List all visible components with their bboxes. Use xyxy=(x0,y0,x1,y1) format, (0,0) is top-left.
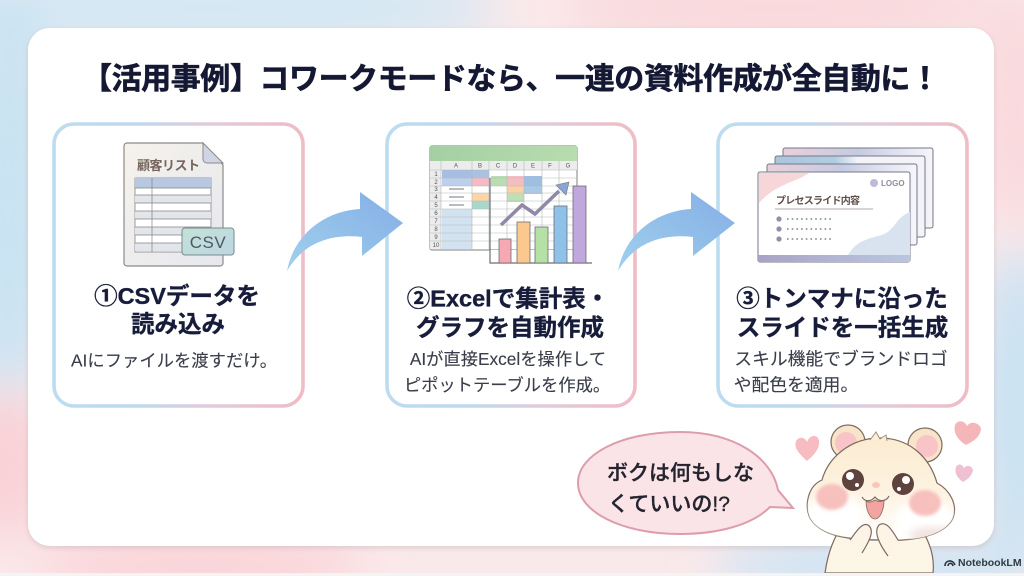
description 1: AIにファイルを渡すだけ。 xyxy=(71,350,277,370)
icon: spreadsheet with bar chart: 3 xyxy=(434,187,438,193)
arrow: step 2 to 3 xyxy=(618,192,735,271)
hamster hands xyxy=(850,524,898,556)
icon: CSV customer list document: 顧客リスト xyxy=(137,158,200,173)
bottom edge strip xyxy=(0,573,1024,576)
icon: spreadsheet with bar chart: F xyxy=(548,164,552,170)
panel: step 3 slides xyxy=(718,124,967,406)
icon: spreadsheet with bar chart xyxy=(430,146,592,263)
icon: spreadsheet with bar chart: 8 xyxy=(434,227,438,233)
icon: spreadsheet with bar chart: 4 xyxy=(434,195,438,201)
hamster mascot xyxy=(805,425,961,573)
arrow: step 1 to 2 xyxy=(287,192,403,271)
heading 1: 読み込み xyxy=(131,311,225,337)
hamster body xyxy=(825,520,933,573)
heading 3: スライドを一括生成 xyxy=(737,314,948,340)
icon: spreadsheet with bar chart: 9 xyxy=(434,235,438,241)
panel: step 1 CSV xyxy=(54,124,303,406)
speech bubble: くていいの!? xyxy=(608,493,730,516)
speech bubble xyxy=(578,432,793,534)
icon: spreadsheet with bar chart: 7 xyxy=(434,219,438,225)
panel: step 2 Excel xyxy=(387,124,635,406)
description 2: ピポットテーブルを作成。 xyxy=(404,375,610,395)
icon: stacked slide deck: LOGO xyxy=(881,179,905,188)
icon: heart top right xyxy=(955,421,981,445)
title: 【活用事例】コワークモードなら、一連の資料作成が全自動に！ xyxy=(82,62,940,96)
icon: heart small right xyxy=(955,464,973,482)
hamster nose and mouth xyxy=(862,482,889,519)
icon: spreadsheet with bar chart: 2 xyxy=(434,180,438,186)
icon: spreadsheet with bar chart: D xyxy=(513,164,518,170)
card frame 2 xyxy=(387,124,635,406)
hamster eyes xyxy=(842,469,914,495)
description 2: AIが直接Excelを操作して xyxy=(410,349,606,369)
card frame 3 xyxy=(718,124,967,406)
icon: stacked slide deck: プレセスライド内容 xyxy=(776,194,860,207)
hamster head xyxy=(807,438,955,540)
icon: spreadsheet with bar chart: 10 xyxy=(433,243,440,249)
heading 2: ②Excelで集計表・ xyxy=(407,286,609,312)
icon: heart left xyxy=(795,436,819,461)
icon: CSV customer list document: CSV xyxy=(190,233,226,252)
icon: spreadsheet with bar chart: 5 xyxy=(434,203,438,209)
icon: spreadsheet with bar chart: C xyxy=(496,164,501,170)
icon: spreadsheet with bar chart: B xyxy=(478,164,482,170)
card frame 1 xyxy=(54,124,303,406)
heading 2: グラフを自動作成 xyxy=(416,314,604,340)
heading 1: ①CSVデータを xyxy=(94,282,260,309)
description 3: スキル機能でブランドロゴ xyxy=(734,348,948,369)
icon: CSV customer list document xyxy=(124,143,234,266)
icon: spreadsheet with bar chart: 1 xyxy=(434,172,438,178)
icon: spreadsheet with bar chart: 6 xyxy=(434,211,438,217)
description 3: や配色を適用。 xyxy=(734,375,858,395)
heading 3: ③トンマナに沿った xyxy=(736,286,948,312)
speech bubble: ボクは何もしな xyxy=(607,462,754,485)
hamster ears xyxy=(831,425,942,462)
NotebookLM mark: NotebookLM xyxy=(958,557,1022,569)
hamster cheeks xyxy=(816,484,941,516)
icon: spreadsheet with bar chart: G xyxy=(566,164,571,170)
icon: spreadsheet with bar chart: A xyxy=(454,164,458,170)
icon: spreadsheet with bar chart: E xyxy=(531,164,535,170)
icon: stacked slide deck xyxy=(758,148,933,262)
